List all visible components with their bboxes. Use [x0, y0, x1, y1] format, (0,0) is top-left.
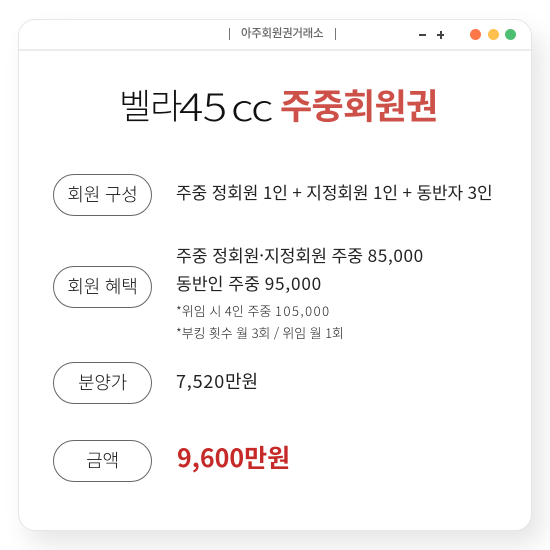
left bar [229, 28, 230, 40]
icon: minus [419, 34, 426, 36]
icon: yellow window dot [488, 29, 499, 40]
pill: 회원 구성: 회원 구성 [67, 181, 138, 207]
pill: 금액 [53, 440, 152, 482]
pill: 금액: 금액 [86, 447, 119, 473]
icon: orange window dot [470, 29, 481, 40]
title: 벨라: 벨라 [119, 79, 181, 130]
icon: plus [437, 31, 444, 39]
icon: green window dot [505, 29, 516, 40]
note line 2: *부킹 횟수 월 3회 / 위임 월 1회 [176, 323, 344, 342]
title: 주중회원권: 주중회원권 [280, 79, 438, 130]
title: 45: 45 [179, 77, 227, 132]
note line 1: *위임 시 4인 주중 105,000 [176, 301, 331, 320]
text: 분양가 value: 7,520만원 [176, 368, 258, 394]
right bar [335, 28, 336, 40]
pill: 분양가: 분양가 [78, 369, 127, 395]
text block: 회원 혜택 values [176, 242, 424, 342]
text: 회원 구성 value: 주중 정회원 1인 + 지정회원 1인 + 동반자 3인 [176, 179, 492, 204]
benefit line 1: 주중 정회원·지정회원 주중 85,000 [176, 242, 424, 267]
pill: 회원 구성 [53, 174, 152, 216]
pill: 분양가 [53, 362, 152, 404]
window header bar [19, 49, 531, 51]
title: cc: cc [231, 78, 272, 132]
text: 금액 value: 9,600만원 [177, 439, 290, 475]
pill: 회원 혜택: 회원 혜택 [67, 273, 138, 299]
pill: 회원 혜택 [53, 266, 152, 308]
site name text: 아주회원권거래소 [241, 25, 323, 41]
benefit line 2: 동반인 주중 95,000 [176, 270, 322, 295]
title [119, 77, 438, 132]
